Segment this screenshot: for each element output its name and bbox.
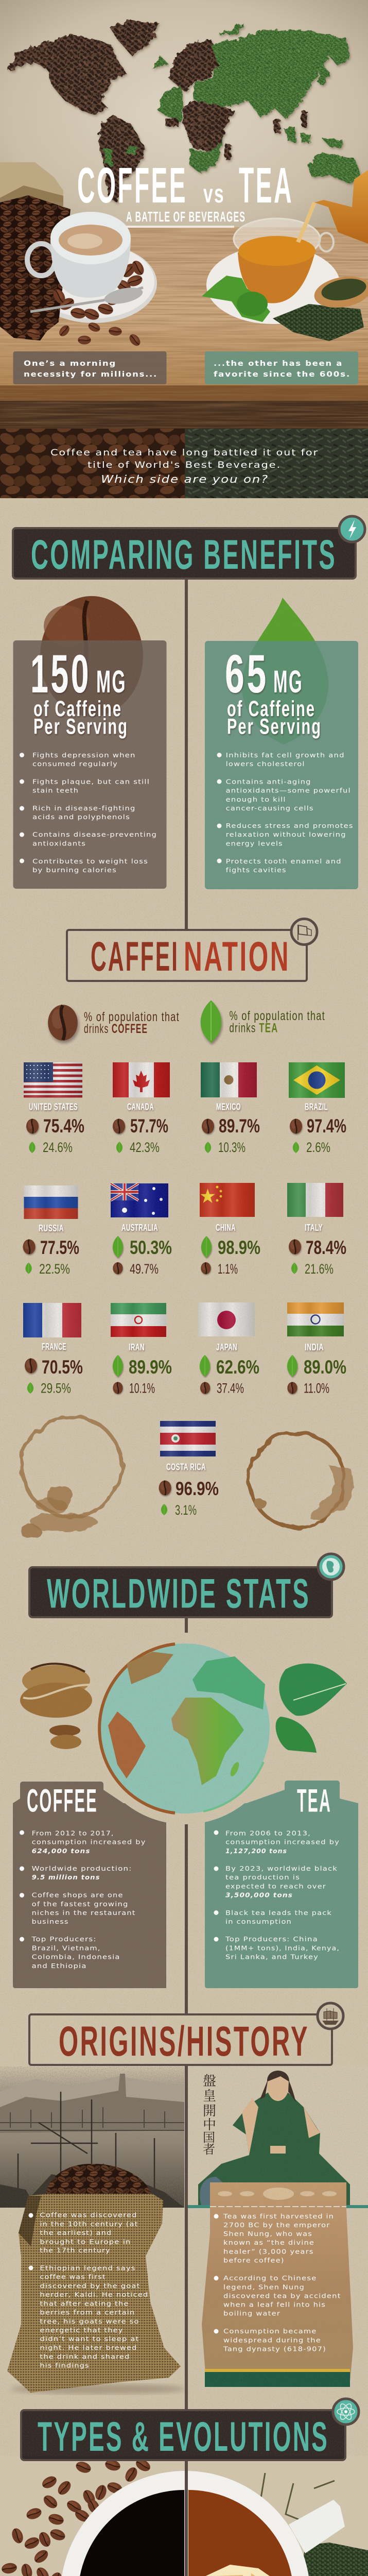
country: China: CHINA [216,1222,236,1233]
callout: one's a morning necessity: One’s a morning [24,360,116,368]
panel: coffee worldwide stats: Colombia, Indonesia [32,1953,120,1961]
country: Russia: RUSSIA [39,1223,64,1233]
intro band: Coffee and tea have long battled it out for [50,448,319,458]
country: United States [24,1062,84,1155]
country: United States: 24.6% [43,1140,73,1155]
panel: coffee worldwide stats: 624,000 tons [32,1847,91,1855]
sack text: herder, Kaldi. He noticed [40,2291,148,2298]
panel: tea benefits: Inhibits fat cell growth and [226,751,345,759]
legend: coffee: drinks COFFEE [84,1022,148,1036]
subtitle: A BATTLE OF BEVERAGES [126,209,246,225]
tea bag text: healer” (3,000 years [223,2248,314,2256]
heading: caffeination: NATION [184,934,290,980]
panel: tea benefits: relaxation without lowering [226,831,346,838]
country: Italy [287,1183,346,1277]
tea bag text: discovered tea by accident [223,2292,341,2299]
country: Brazil: BRAZIL [305,1101,328,1112]
tea bag text: boiling water [223,2310,281,2317]
country: Japan: 62.6% [216,1357,259,1378]
illustration: tea cup, teapot and loose tea [202,170,368,341]
country: Australia: 50.3% [130,1237,172,1258]
country: Mexico: 89.7% [219,1115,260,1137]
legend: coffee: % of population that [84,1010,180,1024]
wooden table [0,226,368,429]
country: Iran: 89.9% [129,1357,172,1378]
panel: tea worldwide stats: Top Producers: China [225,1935,318,1943]
sack text: the drink and shared [40,2353,130,2361]
sack text: tree, his goats were so [40,2317,139,2325]
painting: Shen Nung in leaf cloak: 国 [203,2127,215,2145]
panel: coffee benefits: 150 [30,644,91,704]
country: Mexico: 10.3% [218,1140,246,1155]
panel: tea benefits: energy levels [226,840,283,847]
panel: tea benefits: Reduces stress and promotes [226,822,354,829]
panel: coffee benefits [13,640,167,889]
panel: coffee benefits: Rich in disease-fighting [32,804,136,812]
tea bag text: Shen Nung, who was [223,2230,312,2238]
panel: tea benefits: antioxidants—some powerful [226,786,351,794]
country: United States: UNITED STATES [29,1101,78,1112]
sack text: didn’t want to sleep at [40,2335,139,2343]
tea bag text [223,2212,341,2352]
sack text: energetic that they [40,2326,124,2334]
panel: coffee worldwide stats: consumption increased by [32,1838,146,1845]
scattered coffee beans [0,2457,152,2576]
panel: tea worldwide stats: in consumption [225,1918,292,1925]
tea bag text: Tea was first harvested in [223,2212,334,2220]
painting: Shen Nung in leaf cloak: 者 [203,2139,215,2157]
panel: tea worldwide stats: Sri Lanka, and Turkey [225,1953,319,1961]
lemon slice [188,2565,290,2576]
panel: tea benefits: Contains anti-aging [226,778,311,785]
country: Canada: 42.3% [130,1140,160,1155]
sack text [40,2211,148,2369]
sack text: Coffee was discovered [40,2211,137,2219]
country: Japan [198,1302,259,1396]
panel: coffee benefits: acids and polyphenols [32,813,130,821]
panel: coffee benefits: consumed regularly [32,760,118,768]
country: Iran: IRAN [129,1342,145,1352]
panel: coffee worldwide stats: Coffee shops are one [32,1891,124,1899]
panel: coffee worldwide stats: COFFEE [27,1783,98,1819]
painting: Shen Nung in leaf cloak [188,2066,368,2208]
painting: Shen Nung in leaf cloak: 盤 [203,2071,216,2090]
tea bag text: legend, Shen Nung [223,2283,305,2291]
tea bag text: known as “the divine [223,2239,314,2246]
connector line through cup [185,2461,188,2576]
panel: coffee worldwide stats: business [32,1918,69,1925]
country: Canada: 57.7% [130,1115,168,1137]
tea bag text: 2700 BC by the emperor [223,2221,330,2229]
panel: coffee benefits: Contributes to weight loss [32,857,148,865]
panel: coffee worldwide stats: niches in the restaurant [32,1909,136,1917]
icon: atom badge [333,2399,359,2425]
country: Costa Rica: COSTA RICA [166,1461,206,1472]
engraving: port city [0,2066,184,2208]
coffee stain ring left [20,1416,121,1538]
country: France: FRANCE [42,1341,66,1352]
country: India: 11.0% [304,1381,329,1396]
callout: one's a morning necessity: necessity for millions... [24,370,157,379]
panel: coffee worldwide stats: Brazil, Vietnam, [32,1944,101,1952]
country: France: 29.5% [41,1381,71,1396]
panel: coffee benefits: Contains disease-preventing [32,831,157,838]
panel: tea benefits: 65 [225,644,269,704]
legend: tea: % of population that [230,1009,325,1023]
panel: tea benefits: MG [273,664,303,699]
heading: origins/history [29,2003,343,2065]
intro band: Which side are you on? [101,473,269,485]
country: Japan: 37.4% [217,1381,244,1396]
panel: tea worldwide stats: consumption increased by [225,1838,340,1845]
panel: tea benefits: enough to kill [226,795,286,803]
panel: coffee worldwide stats: Top Producers: [31,1935,97,1943]
callout: the other a favorite: favorite since the 600s. [214,370,351,379]
country: Brazil: 97.4% [307,1115,346,1137]
sack text: the 17th century [40,2246,110,2254]
panel: tea worldwide stats: By 2023, worldwide black [225,1865,338,1872]
title: vs [203,179,225,208]
icon: flag badge [291,919,317,945]
sack text: his findings [40,2362,90,2369]
watercolor tea leaves [276,1664,347,1753]
panel: coffee worldwide stats: and Ethiopia [32,1962,87,1970]
legend: coffee [48,1005,180,1041]
country: Iran: 10.1% [129,1381,155,1396]
panel: tea worldwide stats [205,1781,358,1988]
panel: coffee benefits: MG [96,664,127,699]
panel: tea worldwide stats: Black tea leads the pack [225,1909,332,1917]
panel: tea worldwide stats: TEA [297,1783,331,1819]
country: India: INDIA [305,1342,324,1352]
tea bag text: when a leaf fell into his [223,2301,326,2309]
country: Russia [23,1185,79,1277]
panel: tea worldwide stats: 3,500,000 tons [225,1891,293,1899]
sack text: the earliest) and [40,2229,112,2236]
hero: wall with tea and coffee world map [0,0,368,227]
country: Italy: 21.6% [305,1261,334,1277]
icon: ship badge [318,2003,343,2029]
loose tea, tea bag and lemon side details [260,2473,368,2576]
country: Costa Rica: 3.1% [175,1502,197,1518]
panel: tea worldwide stats: From 2006 to 2013, [225,1829,311,1837]
sack text: that after eating the [40,2300,129,2307]
country: Costa Rica: 96.9% [176,1478,219,1499]
big cup of black coffee and tea [19,2471,345,2576]
country: Russia: 77.5% [40,1237,79,1258]
country: Brazil: 2.6% [306,1140,330,1155]
tea bag text: Tang dynasty (618-907) [223,2345,326,2352]
sack text: Ethiopian legend says [40,2264,136,2272]
country: China: 1.1% [218,1261,238,1277]
country: Australia: 49.7% [130,1261,159,1277]
sack text: berries from a certain [40,2308,135,2316]
panel: tea worldwide stats: tea production is [225,1873,300,1881]
country: India: 89.0% [304,1357,346,1378]
tea bag text: According to Chinese [223,2274,317,2282]
country: United States: 75.4% [43,1115,84,1137]
sack text: night. He later brewed [40,2344,137,2351]
painting: Shen Nung in leaf cloak: 中 [203,2114,216,2133]
sack text: discovered by the goat [40,2282,140,2290]
panel: tea worldwide stats: 1,127,200 tons [225,1847,287,1855]
tea bag text: Consumption became [223,2327,317,2335]
panel: coffee worldwide stats: Worldwide production: [32,1865,132,1872]
country: Japan: JAPAN [216,1342,237,1352]
panel: coffee benefits: by burning calories [32,866,117,874]
hero: wall with tea and coffee world map: TEA [239,157,293,213]
panel: coffee benefits: Per Serving [33,714,128,739]
connector lines [185,579,188,2576]
country: Canada [113,1062,170,1155]
intro band: title of World's Best Beverage. [87,460,281,470]
panel: tea benefits [205,641,358,889]
country: China [200,1183,260,1277]
country: France [23,1303,83,1396]
coffee bean image [40,596,143,717]
panel: coffee benefits: stain teeth [32,786,79,794]
country: Iran [111,1303,172,1396]
paper tea bag [202,2182,353,2387]
country: Brazil [289,1062,346,1155]
panel: tea benefits: of Caffeine [227,697,316,721]
panel: tea benefits: fights cavities [226,866,287,874]
callout: the other a favorite [205,351,358,384]
watercolor coffee beans [20,1664,92,1749]
country: Italy: 78.4% [306,1237,346,1258]
country: China: 98.9% [218,1237,260,1258]
heading: caffeination [67,919,317,981]
country: Canada: CANADA [127,1101,154,1112]
legend: tea: drinks TEA [230,1021,278,1036]
country: Mexico [201,1062,260,1155]
country: Costa Rica [159,1421,219,1518]
country: Italy: ITALY [305,1222,323,1233]
panel: tea benefits: lowers cholesterol [226,760,305,768]
world map [8,21,361,202]
panel: coffee benefits: of Caffeine [33,697,122,721]
country: India [287,1302,346,1396]
callout: the other a favorite: ...the other has been a [214,360,343,368]
panel: coffee worldwide stats: From 2012 to 2017, [32,1829,114,1837]
tea leaf image [242,598,328,744]
icon: lightning badge [339,516,365,542]
panel: coffee worldwide stats: 9.5 million tons [32,1873,100,1881]
panel: coffee benefits: antioxidants [32,840,86,847]
painting: Shen Nung in leaf cloak: 開 [203,2100,216,2120]
panel: coffee benefits: Fights plaque, but can still [32,778,150,785]
sack text: coffee was first [40,2273,106,2281]
sack text: brought to Europe in [40,2238,131,2245]
panel: tea worldwide stats: (1MM+ tons), India, Kenya, [225,1944,340,1952]
country: Australia: AUSTRALIA [121,1222,158,1233]
illustration: coffee sack, beans and cup [0,162,157,348]
icon: globe badge [318,1554,344,1580]
coffee stain ring right [250,1433,355,1528]
panel: tea benefits: Protects tooth enamel and [226,857,342,865]
tea bag text: widespread during the [223,2336,321,2344]
tea bag text: before coffee) [223,2257,285,2264]
sack text: in the 10th century (at [40,2220,138,2228]
country: France: 70.5% [42,1357,83,1378]
callout: one's a morning necessity [13,351,167,384]
burlap sack of coffee beans [7,2164,185,2394]
heading: caffeination: CAFFEI [91,934,179,980]
country: Mexico: MEXICO [216,1101,241,1112]
panel: tea worldwide stats: expected to reach over [225,1883,326,1890]
painting: Shen Nung in leaf cloak: 皇 [203,2086,216,2105]
panel: coffee worldwide stats: of the fastest growing [32,1900,129,1908]
heading: worldwide stats [29,1554,344,1617]
panel: tea benefits: Per Serving [227,714,322,739]
watercolor globe [89,1633,281,1824]
panel: coffee benefits: Fights depression when [32,751,136,759]
country: Australia [111,1183,172,1277]
title: COFFEE [77,157,187,213]
legend: tea [201,1001,325,1043]
country: Russia: 22.5% [39,1261,70,1277]
panel: tea benefits: cancer-causing cells [226,804,314,812]
panel: coffee worldwide stats [13,1782,166,1988]
intro band [0,429,368,498]
